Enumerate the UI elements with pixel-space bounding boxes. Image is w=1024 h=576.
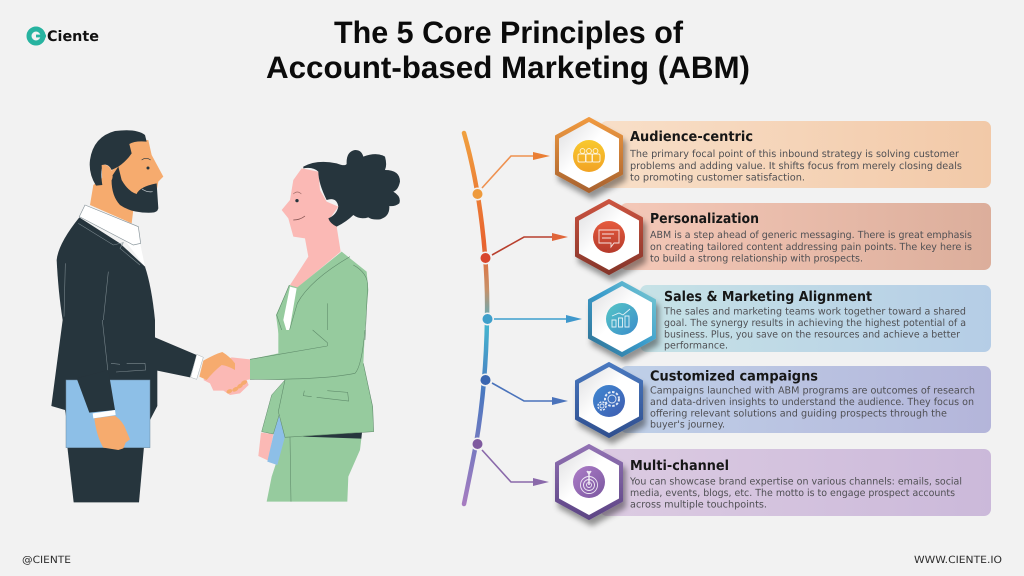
card 2: Personalization: on creating tailored content addressing pain points. The key here is: [650, 242, 972, 253]
title: [266, 15, 750, 85]
title: Account-based Marketing (ABM): [266, 50, 750, 85]
card 4: Customized campaigns: Customized campaigns: [650, 368, 818, 384]
card 5: Multi-channel: Multi-channel: [630, 458, 729, 474]
hexagon 1 with icon: audience: [556, 118, 622, 192]
card 3: Sales & Marketing Alignment: goal. The synergy results in achieving the highest potential of a: [664, 318, 966, 329]
node 1 and arrow: [471, 152, 550, 200]
node 2 and arrow: [479, 233, 568, 264]
card 3: Sales & Marketing Alignment: Sales & Marketing Alignment: [664, 289, 872, 305]
man upper body: [57, 130, 163, 320]
card 5: Multi-channel: [600, 449, 991, 516]
card 3: Sales & Marketing Alignment: business. Plus, you save on the resources and achieve a better: [664, 330, 961, 340]
footer left: @CIENTE: @CIENTE: [22, 555, 71, 566]
card 4: Customized campaigns: buyer's journey.: [650, 420, 725, 430]
node 5 and arrow: [471, 438, 549, 486]
card 2: Personalization: to build a strong relationship with prospects.: [650, 254, 863, 264]
card 1: Audience-centric: to promoting customer satisfaction.: [630, 172, 805, 184]
card 4: Customized campaigns: Campaigns launched with ABM programs are outcomes of research: [650, 386, 975, 396]
card 5: Multi-channel: media, events, blogs, etc. The motto is to engage prospect accounts: [630, 488, 955, 499]
card 3: Sales & Marketing Alignment: [640, 285, 991, 352]
woman lower body: [199, 330, 374, 502]
node 3 and arrow: [481, 312, 582, 326]
title: The 5 Core Principles of: [334, 15, 684, 50]
timeline spine: [464, 133, 487, 504]
illustration: businessman: [51, 130, 203, 502]
footer right: WWW.CIENTE.IO: WWW.CIENTE.IO: [914, 555, 1002, 566]
illustration: businesswoman: [199, 150, 400, 502]
node 4 and arrow: [479, 374, 568, 405]
card 4: Customized campaigns: [620, 366, 991, 433]
card 2: Personalization: ABM is a step ahead of generic messaging. There is great emphasis: [650, 230, 972, 241]
card 4: Customized campaigns: and data-driven insights to understand the audience. They focus on: [650, 397, 974, 408]
woman upper body: [276, 150, 400, 340]
card 1: Audience-centric: The primary focal point of this inbound strategy is solving customer: [629, 149, 960, 160]
card 5: Multi-channel: across multiple touchpoints.: [630, 500, 767, 510]
hexagon 2 with icon: chat message: [576, 200, 642, 274]
hexagon 4 with icon: gears: [576, 363, 642, 437]
card 5: Multi-channel: You can showcase brand expertise on various channels: emails, social: [629, 476, 962, 488]
card 3: Sales & Marketing Alignment: performance.: [664, 340, 728, 352]
hexagon 5 with icon: target: [556, 445, 622, 519]
man lower body: [51, 320, 203, 502]
card 2: Personalization: [620, 203, 991, 270]
card 3: Sales & Marketing Alignment: The sales and marketing teams work together toward a shared: [663, 306, 966, 318]
card 2: Personalization: Personalization: [650, 211, 759, 227]
hexagon 3 with icon: growth chart: [589, 282, 655, 356]
logo: Ciente: Ciente: [47, 29, 99, 45]
card 1: Audience-centric: problems and adding value. It shifts focus from merely closing deals: [630, 161, 962, 172]
card 1: Audience-centric: Audience-centric: [630, 129, 753, 145]
card 4: Customized campaigns: offering relevant solutions and guiding prospects through the: [650, 408, 947, 420]
card 1: Audience-centric: [600, 121, 991, 188]
